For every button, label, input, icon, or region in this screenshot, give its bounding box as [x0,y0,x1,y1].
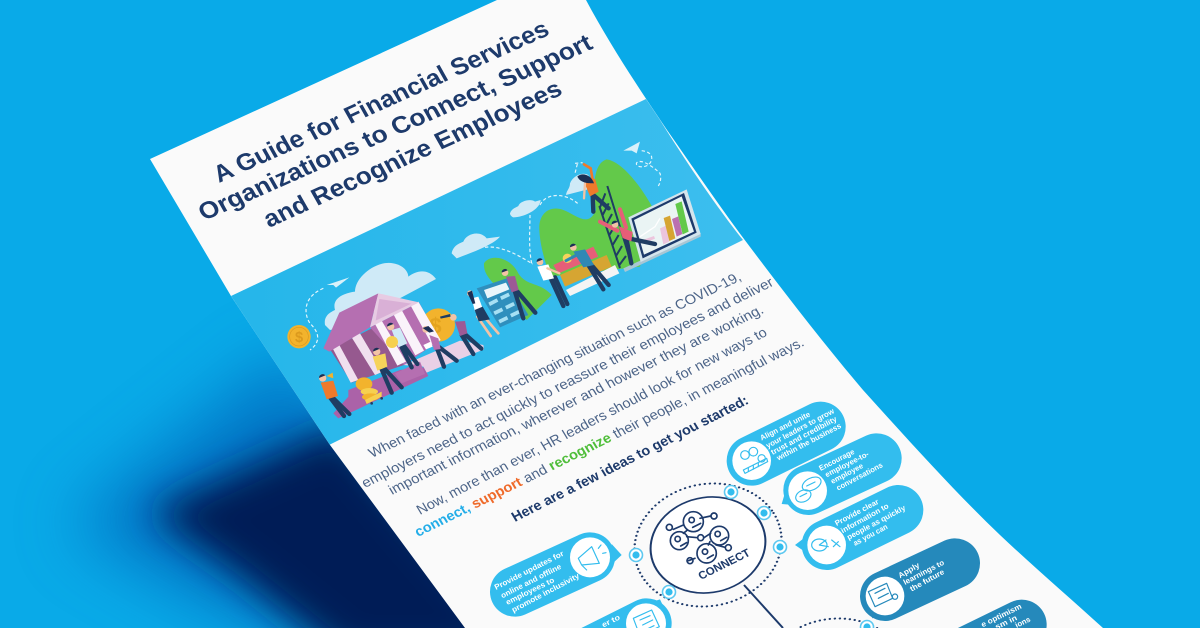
paper drop shadow [70,350,540,628]
diagram: connect hub [609,460,874,628]
bubble: clear information: information to [839,501,891,535]
title: and Recognize Employees [259,76,567,233]
bubble: clear information: people as quickly [845,503,908,542]
cloud [566,174,592,195]
bubble: apply learnings: the future [908,567,946,593]
green hill right [539,159,654,277]
text block: intro paragraph: employers need to act quickly to reassure their employees and deliver [359,275,777,491]
connector line [744,585,783,628]
bubble: align leaders: your leaders to grow [764,406,836,450]
icon: clock and runner [812,539,840,551]
icon: checklist [633,610,659,628]
bubble: align leaders: Align and unite [759,410,812,442]
text block: second paragraph: connect, support and recognize their people, in meaningful ways. [412,335,807,540]
bubble: align leaders: within the business [774,421,843,463]
bubble: clear information: as you can [852,522,889,548]
icon: megaphone [578,545,606,570]
bubble: updates: online and offline [499,562,563,600]
icon: speech bubbles [794,474,823,505]
ring nodes [630,486,874,628]
bubble: partially cropped [570,599,667,628]
bubbles: right column [732,406,955,618]
icon: team [741,447,768,473]
cloud [452,234,500,258]
second dotted ring [734,595,932,628]
text block: intro paragraph: When faced with an ever-changing situation such as COVID-19, [366,270,744,461]
man in purple [502,269,535,318]
woman with papers [422,326,457,367]
woman on ladder [577,164,609,212]
text block: second paragraph: Now, more than ever, HR leaders should look for new ways to [414,325,770,518]
woman at calculator [467,290,498,336]
bubble: conversations: employee [829,461,865,486]
person with money bag [386,323,417,367]
title: A Guide for Financial Services [209,16,554,188]
icon: people network [666,512,731,564]
person with megaphone [319,373,349,416]
cloud [510,200,541,217]
bubble: updates: employees to [504,575,556,607]
heading: ideas: Here are a few ideas to get you started: [509,393,752,525]
big coin [422,308,455,342]
bubble: conversations [782,447,884,510]
big coin: $ [429,313,442,338]
man in white shirt [537,258,567,306]
paper plane [327,277,349,288]
bubble: clear information [795,497,908,564]
bubble: align leaders [732,406,843,481]
illustration: bank scene [287,263,484,418]
panel: illustration band [231,99,743,445]
bubble: clear information: Provide clear [833,497,880,528]
coin [287,325,311,348]
green hill left [484,258,552,320]
ladder [599,186,631,268]
bank building [323,293,441,383]
large cloud [325,263,436,330]
panel: paper sheet [150,0,1103,628]
monitor [623,189,701,272]
bubble: updates [493,537,622,614]
person in yellow [373,348,402,393]
text block: intro paragraph: important information, wherever and however they are working. [386,302,767,498]
bubble: updates: promote inclusivity [510,571,582,614]
man on ladder [600,209,655,263]
bubble: conversations: employee-to- [823,449,871,479]
bubble: apply learnings: learnings to [902,558,946,587]
illustration: growth scene [452,142,701,336]
hub circle [631,479,785,611]
bubble: optimism, cropped [947,602,1032,628]
man with telescope [440,314,481,354]
stack of books [553,247,619,296]
bubble: align leaders: trust and credibility [769,414,839,457]
title: Organizations to Connect, Support [194,30,597,226]
bubble: conversations: Encourage [817,447,856,473]
coin stack and cart [356,377,383,405]
calculator [477,278,528,327]
paper plane [623,142,640,153]
bubble: apply learnings [865,558,955,618]
stairs [333,341,484,418]
icon: learning [868,583,898,607]
bubble: apply learnings: Apply [896,560,922,580]
dotted ring [609,460,807,628]
bubble: conversations: conversations [835,460,884,492]
dashed flight path [306,288,323,350]
label: connect: CONNECT [696,546,753,582]
coin: $ [295,330,303,346]
bubbles: left column [493,537,667,628]
bubble: updates: Provide updates for [493,549,565,592]
man in blue on books [566,244,609,289]
dashed flight paths [485,151,661,264]
